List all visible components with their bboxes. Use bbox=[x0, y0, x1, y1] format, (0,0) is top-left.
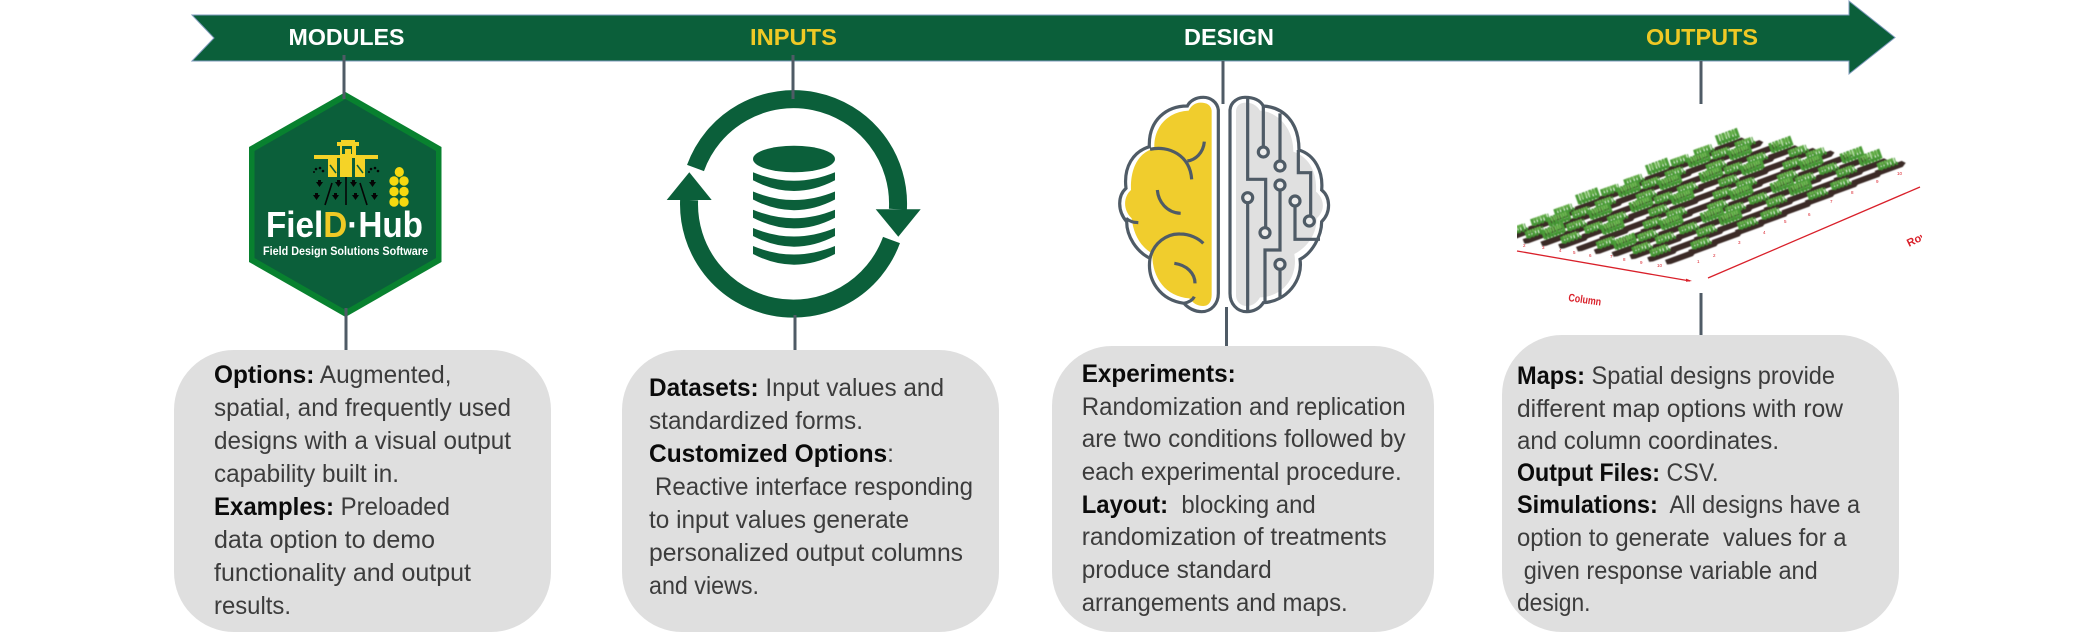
logo tagline: Field Design Solutions Software bbox=[263, 246, 428, 258]
panel: design: Experiments: bbox=[1082, 360, 1236, 388]
connector: design top bbox=[1222, 61, 1224, 104]
connector: inputs bottom bbox=[794, 315, 796, 350]
panel: inputs bbox=[622, 350, 999, 632]
panel: design: produce standard bbox=[1082, 556, 1272, 584]
connector: design bottom bbox=[1225, 307, 1228, 347]
panel: outputs: Maps: Spatial designs provide bbox=[1517, 362, 1835, 390]
logo wordmark: FielD·Hub bbox=[266, 204, 423, 245]
column axis label: Column bbox=[1568, 292, 1602, 309]
panel: modules bbox=[174, 350, 551, 632]
connector: modules top bbox=[342, 55, 346, 99]
panel: inputs: personalized output columns bbox=[649, 539, 963, 567]
panel: inputs: Datasets: Input values and bbox=[649, 374, 944, 402]
panel: modules: Options: Augmented, bbox=[214, 361, 452, 389]
connector: modules bottom bbox=[344, 308, 348, 350]
sprayer illustration bbox=[313, 140, 379, 205]
timeline arrow bbox=[192, 1, 1895, 74]
panel: design: arrangements and maps. bbox=[1082, 589, 1348, 617]
panel: modules: spatial, and frequently used bbox=[214, 394, 511, 422]
panel: inputs: and views. bbox=[649, 572, 759, 600]
column axis ticks: 2345678910 bbox=[1523, 243, 1662, 268]
panel: design: are two conditions followed by bbox=[1082, 425, 1406, 453]
chart: field plot map bbox=[1505, 132, 1932, 309]
panel: design: Layout: blocking and bbox=[1082, 491, 1316, 519]
connector: outputs bottom bbox=[1700, 293, 1702, 337]
panel: modules: data option to demo bbox=[214, 526, 435, 554]
panel: inputs: standardized forms. bbox=[649, 407, 863, 435]
panel: inputs: Reactive interface responding bbox=[655, 473, 973, 501]
panel: outputs bbox=[1502, 335, 1899, 632]
heading: outputs: OUTPUTS bbox=[1646, 24, 1758, 50]
heading: modules: MODULES bbox=[288, 24, 404, 50]
panel: modules: Examples: Preloaded bbox=[214, 493, 450, 521]
heading: design: DESIGN bbox=[1184, 24, 1274, 50]
panel: outputs: Output Files: CSV. bbox=[1517, 459, 1718, 487]
connector: inputs top bbox=[792, 55, 794, 99]
panel: inputs: Customized Options: bbox=[649, 440, 894, 468]
panel: design: Randomization and replication bbox=[1082, 393, 1406, 421]
panel: modules: results. bbox=[214, 592, 291, 620]
row axis ticks: 12345678910 bbox=[1697, 171, 1902, 264]
row axis label: Row bbox=[1905, 229, 1932, 250]
panel: modules: designs with a visual output bbox=[214, 427, 511, 455]
panel: outputs: different map options with row bbox=[1517, 395, 1844, 423]
panel: outputs: option to generate values for a bbox=[1517, 524, 1847, 552]
icon: half brain half circuit bbox=[1120, 97, 1329, 312]
panel: modules: capability built in. bbox=[214, 460, 399, 488]
crop plots grid bbox=[1505, 132, 1906, 264]
panel: outputs: Simulations: All designs have a bbox=[1517, 491, 1860, 519]
panel: outputs: given response variable and bbox=[1524, 557, 1818, 585]
panel: design: each experimental procedure. bbox=[1082, 458, 1402, 486]
panel: outputs: design. bbox=[1517, 589, 1590, 617]
panel: design: randomization of treatments bbox=[1082, 523, 1387, 551]
column axis bbox=[1517, 251, 1690, 281]
connector: outputs top bbox=[1700, 61, 1702, 104]
icon: FielD-Hub hexagon logo bbox=[249, 92, 442, 317]
wheat illustration bbox=[389, 167, 409, 207]
row axis bbox=[1708, 187, 1920, 278]
panel: outputs: and column coordinates. bbox=[1517, 427, 1779, 455]
panel: design bbox=[1052, 346, 1434, 632]
panel: modules: functionality and output bbox=[214, 559, 471, 587]
panel: inputs: to input values generate bbox=[649, 506, 909, 534]
heading: inputs: INPUTS bbox=[750, 24, 837, 50]
icon: database with circular arrows bbox=[667, 99, 921, 309]
